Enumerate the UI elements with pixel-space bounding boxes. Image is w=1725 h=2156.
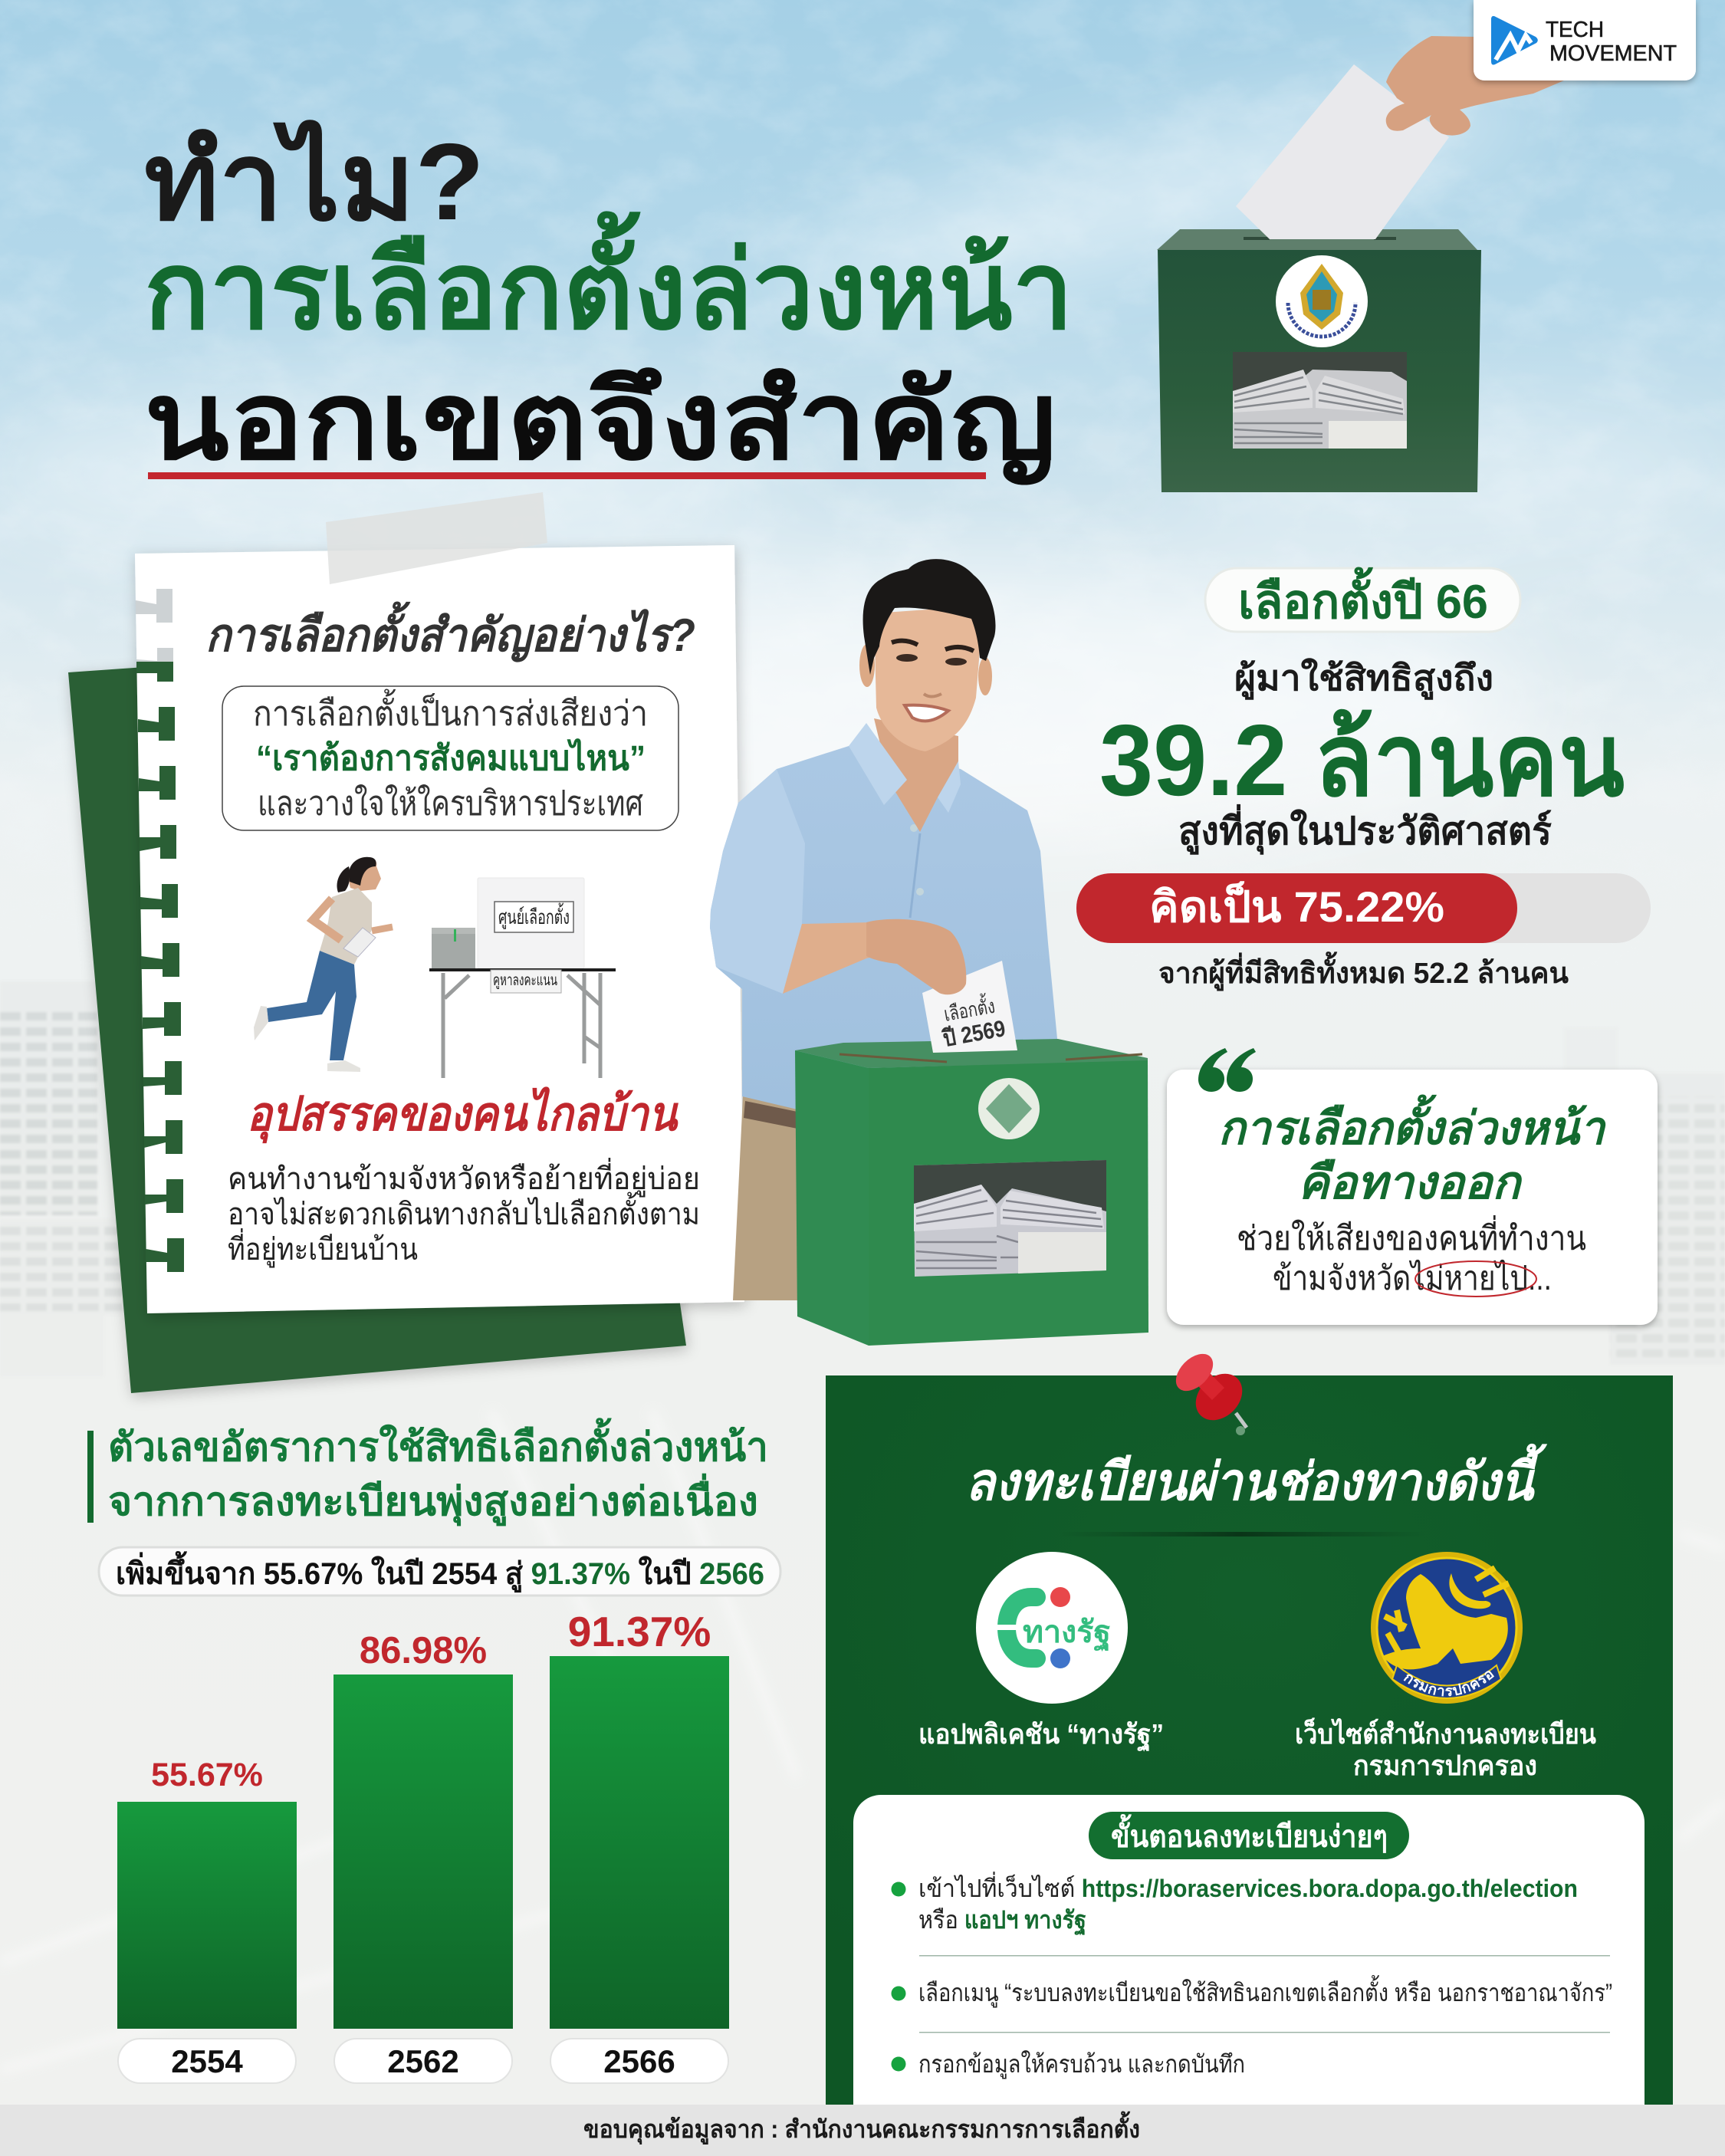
hand <box>1386 36 1564 136</box>
steps card <box>853 1795 1644 2108</box>
box front <box>1158 250 1481 492</box>
progress bar: คิดเป็น 75.22% <box>1149 880 1444 931</box>
icon: DOPA seal: กรมการปกครอง <box>1403 1671 1494 1696</box>
bar 2566 <box>550 1608 729 2083</box>
footer source bar: ขอบคุณข้อมูลจาก : สำนักงานคณะกรรมการการเลือกตั้ง <box>583 2111 1140 2145</box>
icon: red push pin <box>1169 1347 1251 1435</box>
tape <box>326 492 547 584</box>
box top face <box>1157 229 1477 250</box>
chart heading: ตัวเลขอัตราการใช้สิทธิเลือกตั้งล่วงหน้า <box>108 1418 768 1470</box>
bar 2554 <box>117 1757 297 2083</box>
background sky and city <box>0 0 1725 1357</box>
callout: quote card: ข้ามจังหวัดไม่หายไป... <box>1273 1259 1552 1297</box>
title line 2: การเลือกตั้งล่วงหน้า <box>144 211 1073 352</box>
green backing sheet <box>68 636 686 1393</box>
increase pill <box>99 1547 780 1596</box>
red circled highlight <box>1415 1261 1536 1297</box>
neck <box>874 718 958 832</box>
forearm <box>783 922 882 994</box>
box top flap <box>795 1039 1148 1068</box>
turnout label: ผู้มาใช้สิทธิสูงถึง <box>1234 657 1493 700</box>
step 3: กรอกข้อมูลให้ครบถ้วน และกดบันทึก <box>918 2050 1245 2079</box>
accent bar <box>87 1431 94 1523</box>
box seal <box>978 1078 1040 1139</box>
ballot paper <box>1236 64 1449 239</box>
definition box <box>222 686 678 830</box>
title underline <box>148 472 986 479</box>
title line 1: ทำไม? <box>144 120 485 243</box>
progress bar <box>1076 873 1651 943</box>
step 2: เลือกเมนู “ระบบลงทะเบียนขอใช้สิทธินอกเขตเลือกตั้ง หรือ นอกราชอาณาจักร” <box>918 1975 1612 2008</box>
step 1: เข้าไปที่เว็บไซต์ https://boraservices.bora.dopa.go.th/election <box>918 1872 1578 1902</box>
ears <box>859 644 875 687</box>
panel: chart section <box>87 1418 780 2083</box>
obstacle text <box>228 1158 700 1267</box>
bar chart <box>117 1608 729 2083</box>
year pill <box>1205 567 1520 632</box>
panel heading: ลงทะเบียนผ่านช่องทางดังนี้ <box>965 1443 1547 1511</box>
callout: quote card: คือทางออก <box>1298 1157 1523 1208</box>
illustration: running woman <box>254 857 393 1072</box>
bar 2566: 91.37% <box>568 1608 711 1655</box>
sleeve highlight <box>710 769 805 994</box>
ballot card: ปี 2569 <box>940 1016 1007 1052</box>
face details <box>892 641 974 651</box>
icon: Thang Rat app: ทางรัฐ <box>1023 1615 1111 1652</box>
callout: quote card <box>1167 1048 1658 1325</box>
panel: chart section: จากการลงทะเบียนพุ่งสูงอย่างต่อเนื่อง <box>108 1474 758 1527</box>
logo: Tech Movement <box>1474 0 1696 81</box>
obstacle text: อาจไม่สะดวกเดินทางกลับไปเลือกตั้งตาม <box>228 1191 700 1231</box>
title <box>144 120 1073 485</box>
ribbon <box>1392 1665 1501 1698</box>
spiral holes <box>136 589 184 1272</box>
record label: สูงที่สุดในประวัติศาสตร์ <box>1178 804 1552 855</box>
steps pill <box>1089 1812 1409 1859</box>
label: app: แอปพลิเคชัน “ทางรัฐ” <box>918 1718 1164 1752</box>
box window with ballots <box>1233 352 1407 449</box>
obstacle text: คนทำงานข้ามจังหวัดหรือย้ายที่อยู่บ่อย <box>228 1158 700 1197</box>
increase pill: เพิ่มขึ้นจาก 55.67% ในปี 2554 สู่ 91.37% ในปี 2566 <box>116 1551 764 1592</box>
quote body: ช่วยให้เสียงของคนที่ทำงาน <box>1237 1214 1586 1257</box>
label: website: เว็บไซต์สำนักงานลงทะเบียน <box>1295 1717 1596 1750</box>
logo: Tech Movement: TECH <box>1546 18 1604 42</box>
quote heading: การเลือกตั้งล่วงหน้า <box>1218 1094 1606 1154</box>
illustration: polling table: คูหาลงคะแนน <box>493 972 557 990</box>
bar 2562 <box>334 1630 513 2083</box>
bar 2562: 2562 <box>387 2043 459 2079</box>
icon: top ballot box with hand <box>1157 36 1564 492</box>
box front <box>869 1060 1148 1346</box>
bar 2566: 2566 <box>603 2043 675 2079</box>
panel: note paper <box>68 492 744 1393</box>
shirt <box>710 746 1058 1109</box>
year pill: เลือกตั้งปี 66 <box>1238 567 1488 629</box>
collar <box>849 723 907 805</box>
face <box>874 606 981 751</box>
lion <box>1382 1574 1508 1669</box>
illustration: man voting <box>710 559 1148 1346</box>
logo mark <box>1491 16 1538 64</box>
pants <box>733 1096 797 1300</box>
illustration: polling table <box>429 878 616 1078</box>
paper heading: การเลือกตั้งสำคัญอย่างไร? <box>205 601 695 662</box>
definition box: การเลือกตั้งเป็นการส่งเสียงว่า <box>253 689 648 733</box>
box seal <box>1276 255 1368 347</box>
quote mark <box>1198 1048 1256 1092</box>
total voters: จากผู้ที่มีสิทธิทั้งหมด 52.2 ล้านคน <box>1158 951 1569 991</box>
white sheet <box>135 545 744 1313</box>
obstacle text: ที่อยู่ทะเบียนบ้าน <box>228 1228 418 1267</box>
icon: Thang Rat app <box>976 1552 1128 1704</box>
bar 2554: 2554 <box>171 2043 243 2079</box>
bar 2554: 55.67% <box>151 1757 263 1793</box>
ballot card <box>922 961 1017 1053</box>
hair <box>863 559 996 675</box>
step 1 <box>891 1872 1578 1936</box>
label: website: กรมการปกครอง <box>1353 1750 1537 1781</box>
panel: 2023 turnout stats <box>1076 567 1651 991</box>
icon: DOPA seal <box>1371 1552 1523 1704</box>
hand <box>866 919 966 994</box>
box window with ballots <box>914 1160 1106 1277</box>
box side face <box>795 1050 869 1346</box>
subheading: obstacle: อุปสรรคของคนไกลบ้าน <box>247 1086 678 1144</box>
footer source bar <box>0 2105 1725 2156</box>
turnout figure: 39.2 ล้านคน <box>1099 704 1625 817</box>
step 1: หรือ แอปฯ ทางรัฐ <box>918 1906 1086 1936</box>
title line 3: นอกเขตจึงสำคัญ <box>144 360 1056 485</box>
definition box: และวางใจให้ใครบริหารประเทศ <box>258 784 643 823</box>
illustration: polling table: ศูนย์เลือกตั้ง <box>498 902 570 929</box>
ballot card: เลือกตั้ง <box>941 991 997 1026</box>
logo: Tech Movement: MOVEMENT <box>1549 41 1677 66</box>
steps pill: ขั้นตอนลงทะเบียนง่ายๆ <box>1111 1814 1388 1854</box>
definition box: “เราต้องการสังคมแบบไหน” <box>256 738 646 777</box>
label: website <box>1295 1717 1596 1781</box>
bar 2562: 86.98% <box>360 1630 487 1671</box>
